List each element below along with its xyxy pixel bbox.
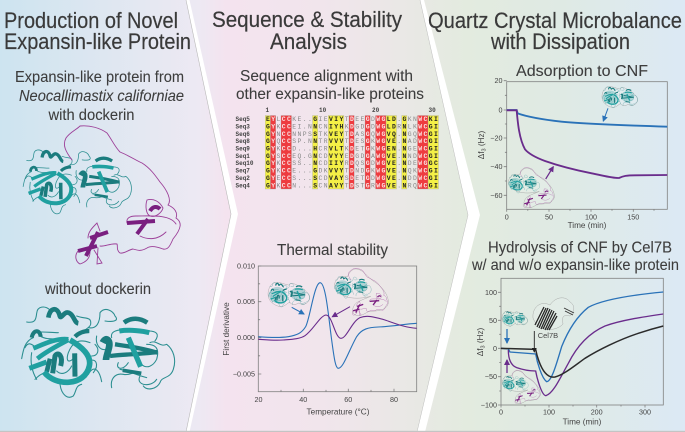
sequence names: Seq10 (236, 160, 254, 167)
heading: hydrolysis: Hydrolysis of CNF by Cel7B (488, 240, 672, 256)
sequence names: Seq7 (236, 168, 250, 175)
heading: QCM-D: with Dissipation (490, 29, 630, 54)
sequence residues: GYSCCEQ.GNCDVYYEDGDGAWGVE.NNDWCGI (266, 153, 439, 160)
arrow: blue (292, 307, 304, 314)
sequence residues: GYQCCSP.NNTRVVVTDESGKWGVE.NADWCGI (266, 138, 439, 145)
y axis title: 3 (482, 148, 488, 152)
curves (258, 283, 417, 368)
heading: adsorption: Adsorption to CNF (516, 63, 648, 80)
protein structure without dockerin (22, 307, 175, 397)
y axis labels (233, 262, 255, 378)
sequence alignment (236, 107, 439, 189)
x axis labels: 80 (390, 395, 398, 404)
column numbers: 10 (319, 107, 327, 114)
panel: sequence and stability (212, 7, 439, 416)
icon: protein with dockerin (502, 370, 540, 404)
arrow: blue (603, 108, 608, 121)
icon: protein without dockerin (268, 282, 310, 307)
y axis labels: −100 (481, 400, 497, 410)
protein structure with dockerin (23, 126, 180, 264)
y axis labels: 50 (489, 316, 497, 325)
x axis labels: 200 (591, 408, 603, 416)
column numbers: 1 (266, 107, 270, 114)
arrow: purple (332, 307, 350, 317)
x axis labels: 40 (299, 395, 307, 404)
heading: production (4, 8, 191, 54)
heading: sequence and stability (212, 7, 403, 54)
y axis labels: −0.005 (233, 370, 255, 378)
text: sequence alignment: other expansin-like proteins (236, 86, 424, 103)
heading: QCM-D (428, 8, 682, 54)
icon: protein with dockerin (334, 268, 388, 315)
text: sequence alignment: Sequence alignment with (240, 68, 413, 85)
heading: production: Expansin-like Protein (4, 29, 191, 54)
curves (507, 110, 667, 178)
y axis labels: 20 (494, 76, 502, 85)
sequence names: Seq2 (236, 175, 250, 182)
sequence residues: GYKCCE...GDKVVYTDNDGKWGVE.NQKWCGI (266, 168, 439, 175)
y axis labels: −50 (485, 372, 497, 381)
sequence residues: GYKCCD...HCRVLTKDETGKWGEN.NGEWCGI (266, 146, 439, 152)
y axis labels: −60 (490, 191, 502, 200)
sequence names: Seq1 (236, 153, 250, 160)
x axis labels: 0 (505, 212, 509, 222)
column numbers: 30 (428, 107, 436, 114)
panel: production of protein (4, 8, 191, 397)
x axis labels: 300 (639, 408, 651, 416)
y axis labels: 0.005 (237, 297, 255, 306)
y axis labels: 0 (493, 344, 497, 353)
panel: QCM-D (428, 8, 682, 426)
column numbers: 20 (372, 107, 380, 114)
y axis labels: 100 (485, 288, 497, 297)
icon: Cel7B enzyme (533, 298, 574, 330)
heading: thermal stability: Thermal stability (277, 242, 388, 259)
y axis labels (481, 288, 497, 410)
arrow: blue (506, 329, 508, 343)
text: sequence alignment (236, 68, 424, 103)
y axis title: First derivative (222, 302, 231, 356)
x axis labels: 60 (344, 395, 352, 404)
x axis title: Time (min) (563, 418, 602, 426)
icon: protein without dockerin (602, 87, 638, 108)
arrow: Cel7B addition (533, 331, 535, 352)
arrow: purple (506, 360, 508, 373)
sequence residues: GYKCCN...SCNAVYTDSTGRWGVE.NRQWCGI (266, 182, 439, 189)
x axis labels: 0 (499, 408, 503, 416)
sequence residues: GYKCCSS..NCDIIYRDQSGDWGVE.NDEWGGC (266, 160, 439, 167)
x axis labels: 100 (543, 408, 555, 416)
sequence residues: GYECCS...SCDVAYSDETGDWGVE.NDDWCGI (266, 175, 439, 182)
heading: hydrolysis (471, 240, 679, 274)
x axis labels: 50 (545, 212, 553, 222)
y axis title: (Hz) (476, 327, 485, 345)
column numbers (266, 107, 436, 114)
y axis labels: −40 (490, 162, 502, 171)
sequence residues: EYLCCKE..GIEVIYTDEEGDWGLD.GKNWCKI (266, 116, 439, 123)
label: Cel7B: Cel7B (538, 331, 558, 340)
x axis labels: 20 (254, 395, 262, 404)
chart: hydrolysis of CNF (476, 278, 663, 426)
text: without dockerin: without dockerin (44, 281, 151, 298)
text: protein with dockerin: Neocallimastix californiae (19, 88, 184, 105)
x axis labels (499, 408, 651, 416)
x axis labels (505, 212, 639, 222)
y axis title: Δf (476, 349, 485, 356)
x axis title: Time (min) (568, 221, 607, 230)
y axis labels: −20 (490, 134, 502, 142)
panel divider: right chevron (417, 0, 480, 432)
x axis title: Temperature (°C) (307, 408, 370, 416)
text: protein with dockerin: with dockerin (48, 107, 135, 124)
sequence names: Seq6 (236, 131, 250, 138)
y axis labels: 0 (498, 106, 502, 114)
text: protein with dockerin (15, 69, 184, 124)
y axis title: Δf (477, 152, 486, 159)
x axis labels: 100 (585, 212, 597, 222)
sequence names: Seq8 (236, 138, 250, 145)
arrow: purple (546, 167, 553, 179)
sequence names: Seq5 (236, 116, 250, 123)
icon: protein without dockerin (502, 311, 528, 326)
x axis labels (254, 395, 398, 404)
sequence names: Seq3 (236, 123, 250, 130)
x axis labels: 150 (627, 212, 639, 222)
heading: sequence and stability: Sequence & Stability (212, 7, 403, 32)
sequence residues: GYNCCNNPSSTKVEYTDASGQWGVQ.NGQWCGI (266, 131, 439, 138)
panel divider: left chevron (186, 0, 238, 432)
chart: thermal stability (222, 262, 417, 416)
y axis labels: 0.010 (237, 262, 255, 270)
curves (501, 292, 663, 396)
sequence names: Seq4 (236, 182, 250, 189)
heading: production: Production of Novel (4, 8, 178, 33)
y axis title: 3 (480, 345, 486, 349)
sequence residues: GYKCCEI.NNCNIYHKDGDGDWGLDRNLKWCGI (266, 123, 439, 130)
y axis labels (490, 76, 502, 200)
y axis labels: 0.000 (237, 333, 255, 342)
sequence names: Seq9 (236, 146, 250, 152)
sequence names (236, 116, 254, 189)
text: protein with dockerin: Expansin-like protein from (15, 69, 184, 86)
y axis title: (Hz) (477, 130, 486, 148)
chart: adsorption to CNF (477, 76, 667, 230)
icon: protein with dockerin (508, 167, 554, 208)
sequence residues (266, 116, 439, 189)
heading: sequence and stability: Analysis (270, 29, 347, 54)
